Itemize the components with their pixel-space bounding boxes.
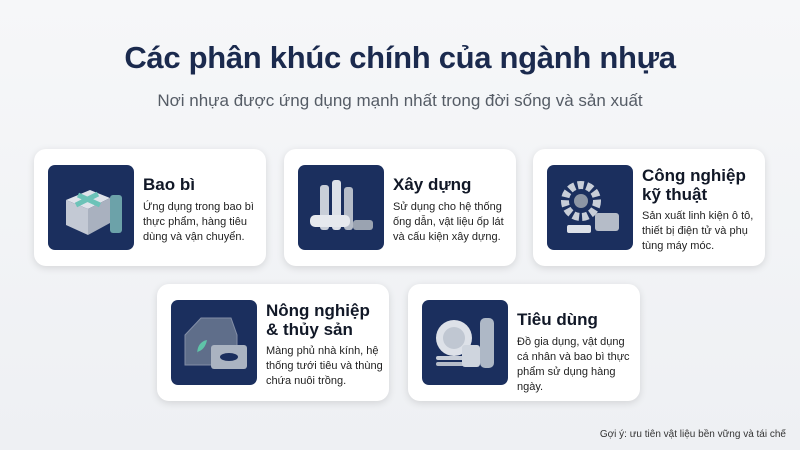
footer note: Gợi ý: ưu tiên vật liệu bền vững và tái chế: [600, 429, 786, 440]
icon: box: [48, 165, 134, 250]
panel: công nghiệp kỹ thuật: [533, 149, 765, 266]
icon: pipes: [298, 165, 384, 250]
text: Ứng dụng trong bao bì thực phẩm, hàng tiêu dùng và vận chuyển.: [143, 201, 254, 243]
icon: gear: [547, 165, 633, 250]
text: Màng phủ nhà kính, hệ thống tưới tiêu và thùng chứa nuôi trồng.: [266, 345, 383, 387]
heading: kỹ thuật: [642, 185, 707, 204]
heading: Nông nghiệp: [266, 301, 370, 320]
panel: tiêu dùng: [408, 284, 640, 401]
subtitle: Nơi nhựa được ứng dụng mạnh nhất trong đời sống và sản xuất: [157, 91, 643, 110]
text: Sản xuất linh kiện ô tô, thiết bị điện tử và phụ tùng máy móc.: [642, 210, 753, 252]
text: Đồ gia dụng, vật dụng cá nhân và bao bì thực phẩm sử dụng hàng ngày.: [517, 336, 630, 393]
heading: Bao bì: [143, 175, 195, 194]
icon: greenhouse: [171, 300, 257, 385]
heading: Công nghiệp: [642, 166, 746, 185]
text: Sử dụng cho hệ thống ống dẫn, vật liệu ốp lát và cấu kiện xây dựng.: [393, 201, 504, 243]
panel: xây dựng: [284, 149, 516, 266]
heading: [642, 166, 746, 204]
heading: Xây dựng: [393, 175, 471, 194]
panel: nông nghiệp: [157, 284, 389, 401]
heading: [266, 301, 370, 339]
title: Các phân khúc chính của ngành nhựa: [124, 40, 676, 75]
panel: bao bì: [34, 149, 266, 266]
heading: Tiêu dùng: [517, 310, 598, 329]
heading: & thủy sản: [266, 320, 353, 339]
icon: dishes: [422, 300, 508, 385]
